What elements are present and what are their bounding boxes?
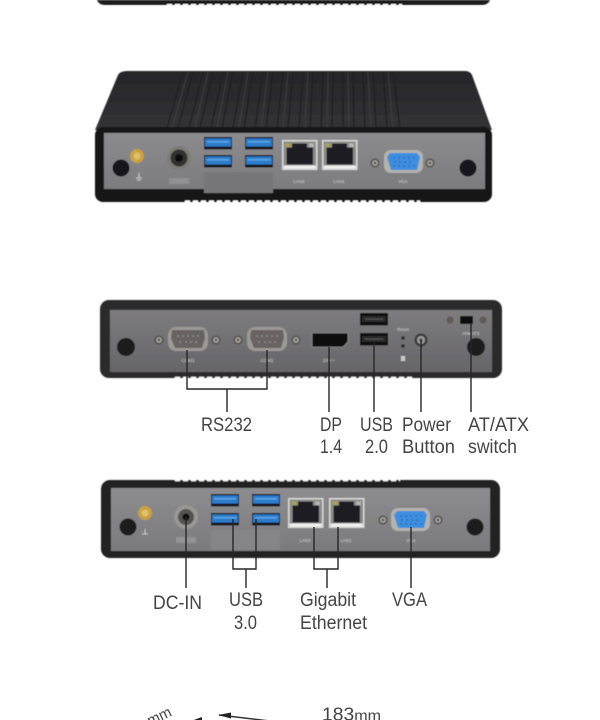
USB label patch	[211, 530, 280, 550]
chassis top with ribs	[95, 71, 492, 130]
USB 2.0 ports	[360, 313, 388, 346]
label: VGA: VGA	[392, 590, 427, 611]
panel labels: Reset	[397, 327, 410, 332]
VGA port	[370, 150, 434, 173]
feet	[117, 338, 485, 356]
feet	[120, 518, 484, 536]
port labels: LAN1	[340, 538, 352, 543]
label: USB 3.0	[229, 590, 263, 634]
label: AT/ATX switch	[468, 415, 529, 458]
panel labels: COM2	[260, 358, 274, 363]
label: USB 2.0: USB	[360, 415, 393, 436]
USB 3.0 ports	[211, 494, 280, 526]
port labels: VGA	[398, 179, 408, 184]
panel labels: COM1	[181, 358, 195, 363]
AT/ATX switch	[446, 316, 486, 324]
plate	[110, 310, 492, 372]
panel labels	[181, 327, 480, 363]
label: DP 1.4: 1.4	[320, 437, 342, 458]
port labels: LAN2	[293, 179, 305, 184]
port labels: LAN2	[299, 538, 311, 543]
DC-IN jack	[174, 505, 198, 543]
grey back plate	[104, 133, 485, 189]
label: DC-IN: DC-IN	[153, 593, 202, 614]
port labels	[299, 538, 416, 543]
label: USB 3.0: USB	[229, 590, 263, 611]
DisplayPort	[312, 333, 348, 347]
power button	[414, 334, 428, 346]
label: DP 1.4: DP	[320, 415, 342, 436]
USB label patch	[204, 172, 273, 193]
plate	[111, 488, 490, 551]
callout lines: rear panel	[186, 517, 411, 588]
VGA port	[378, 508, 442, 531]
mounting feet	[112, 160, 476, 176]
device: rear panel	[101, 480, 500, 558]
callout lines: front panel	[187, 323, 471, 412]
LAN ports	[282, 140, 358, 170]
label: Gigabit Ethernet: Ethernet	[300, 613, 368, 634]
ground screw	[130, 149, 144, 180]
label: AT/ATX switch: AT/ATX	[468, 415, 529, 436]
label: Power Button: Button	[402, 437, 455, 458]
label: DP 1.4	[320, 415, 342, 458]
panel labels: AT⇆ATX	[462, 331, 480, 336]
device: top edge of cropped unit	[97, 0, 490, 5]
port labels	[293, 179, 408, 184]
frame	[101, 480, 500, 558]
device: rear three-quarter view	[95, 71, 492, 202]
port labels: LAN1	[333, 179, 345, 184]
port labels: VGA	[406, 538, 416, 543]
DC-IN jack	[167, 146, 191, 184]
dimension: 183mm	[145, 704, 381, 720]
label: USB 3.0: 3.0	[234, 613, 257, 634]
reset holes	[401, 336, 405, 361]
label: Gigabit Ethernet	[300, 590, 368, 634]
LAN ports	[288, 498, 364, 528]
device: front panel	[100, 300, 502, 378]
label: Power Button: Power	[402, 415, 452, 436]
label: Power Button	[402, 415, 455, 458]
label: USB 2.0: 2.0	[365, 437, 388, 458]
frame	[100, 300, 502, 378]
label: RS232: RS232	[201, 415, 252, 436]
ground screw	[138, 506, 152, 534]
black front frame	[95, 127, 492, 202]
USB 3.0 ports	[204, 137, 273, 168]
COM ports	[154, 327, 300, 351]
label: Gigabit Ethernet: Gigabit	[300, 590, 357, 611]
panel labels: DP++	[323, 358, 335, 363]
label: AT/ATX switch: switch	[468, 437, 517, 458]
label: USB 2.0	[360, 415, 393, 458]
